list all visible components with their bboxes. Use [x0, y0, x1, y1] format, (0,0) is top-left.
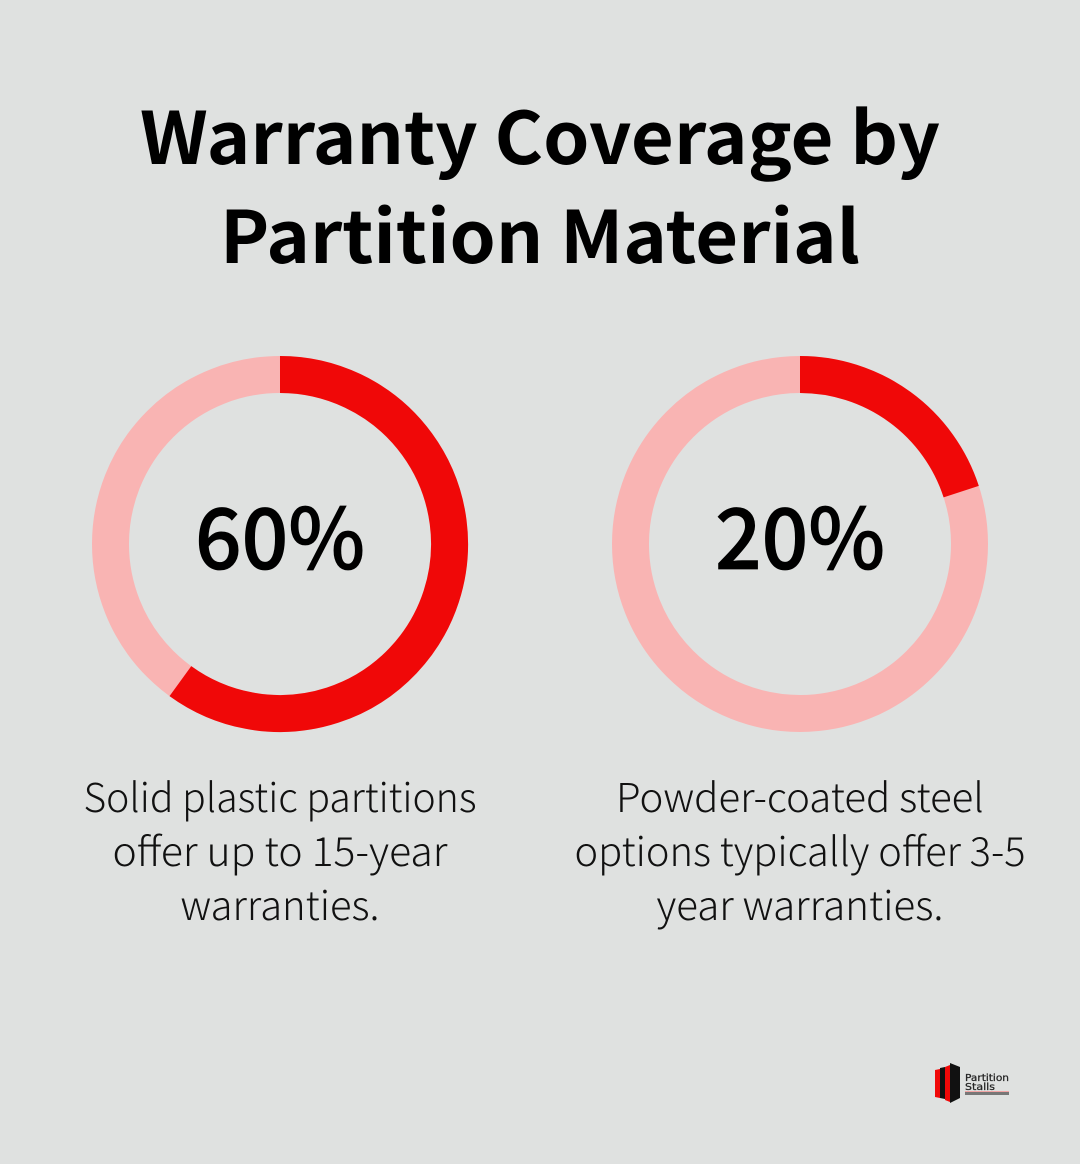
- caption: solid plastic: offer up to 15-year: [112, 820, 448, 878]
- caption: powder-coated steel: Powder-coated steel: [616, 766, 984, 824]
- icon: stall panels: [935, 1063, 960, 1103]
- donut chart: 20%: 20%: [715, 473, 885, 594]
- panel: solid plastic: [84, 374, 476, 932]
- donut chart: 60%: [110, 374, 450, 714]
- title: Partition Material: [220, 179, 860, 284]
- title: [140, 80, 940, 284]
- caption: powder-coated steel: options typically offer 3-5: [574, 820, 1026, 878]
- donut chart: 60%: 60%: [195, 473, 365, 594]
- caption: solid plastic: warranties.: [180, 874, 380, 932]
- caption: solid plastic: [84, 766, 476, 932]
- logo: Partition Stalls: Stalls: [965, 1082, 995, 1093]
- caption: powder-coated steel: [574, 766, 1026, 932]
- logo: Partition Stalls: [935, 1063, 1009, 1103]
- caption: powder-coated steel: year warranties.: [656, 874, 944, 932]
- panel: powder-coated steel: [574, 374, 1026, 932]
- logo: Partition Stalls: Partition: [965, 1073, 1009, 1084]
- title: Warranty Coverage by: [140, 80, 940, 185]
- donut chart: 20%: [630, 374, 970, 714]
- caption: solid plastic: Solid plastic partitions: [84, 766, 476, 824]
